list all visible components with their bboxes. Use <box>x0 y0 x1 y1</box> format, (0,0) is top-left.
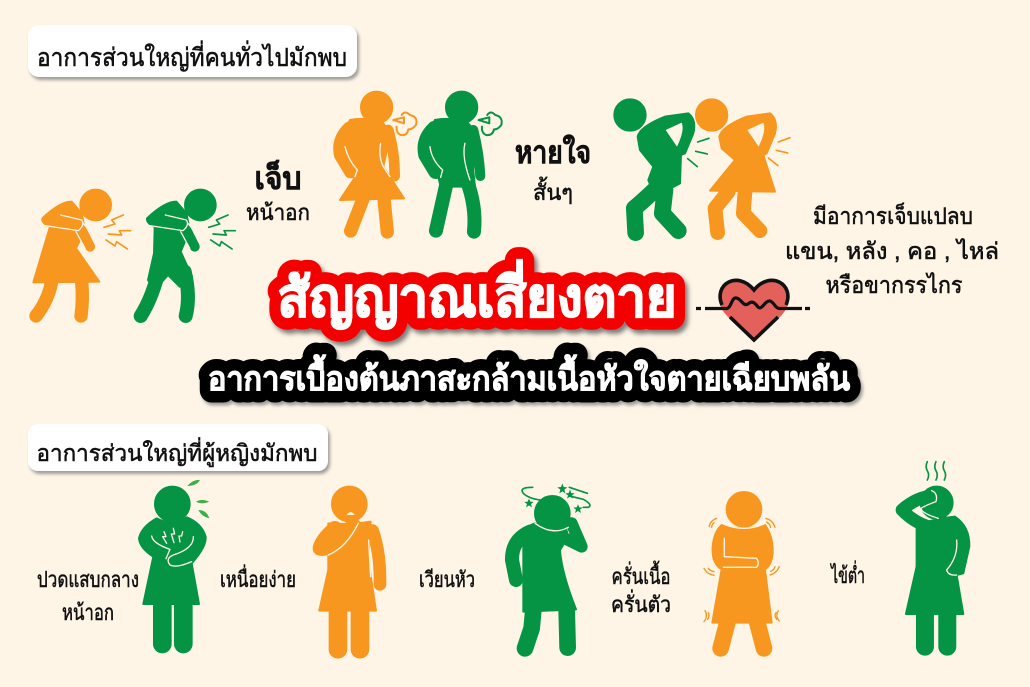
label: short breath <box>515 134 591 205</box>
heading: women's symptoms <box>28 424 328 471</box>
label: radiating pain <box>785 201 999 298</box>
figure: green woman burning chest <box>139 480 209 644</box>
figure: green man short breath <box>425 92 502 232</box>
label: short breath: สั้นๆ <box>533 177 573 205</box>
label: chest pain: หน้าอก <box>246 200 310 225</box>
label: tires easily: เหนื่อยง่าย <box>220 564 296 592</box>
label: chest pain <box>246 159 310 225</box>
figure: orange woman short breath <box>340 92 416 232</box>
label: feverish chills: ครั่นเนื้อ <box>612 561 670 589</box>
figure: green woman fever <box>902 462 969 647</box>
figure: orange woman chest pain <box>33 190 131 316</box>
label: radiating pain: หรือขากรรไกร <box>826 272 962 298</box>
icon: heart with pulse <box>696 280 810 341</box>
label: feverish chills: ครั่นตัว <box>611 589 671 617</box>
subtitle: อาการเบื้องต้นภาสะกล้ามเนื้อหัวใจตายเฉียบพลัน <box>208 354 850 397</box>
label: burning chest <box>37 567 139 625</box>
label: radiating pain: มีอาการเจ็บแปลบ <box>813 201 973 229</box>
heading: women's symptoms: อาการส่วนใหญ่ที่ผู้หญิงมักพบ <box>36 437 318 467</box>
heading: common symptoms: อาการส่วนใหญ่ที่คนทั่วไปมักพบ <box>37 40 347 72</box>
label: burning chest: ปวดแสบกลาง <box>37 567 139 592</box>
label: dizzy: เวียนหัว <box>419 567 475 592</box>
figure: green man back pain <box>614 99 709 233</box>
heading: common symptoms <box>28 25 357 77</box>
label: radiating pain: แขน, หลัง , คอ , ไหล่ <box>785 238 999 264</box>
label: burning chest: หน้าอก <box>62 600 114 625</box>
label: feverish chills <box>611 561 671 617</box>
title: สัญญาณเสี่ยงตาย <box>278 259 676 329</box>
label: low fever: ไข้ต่ำ <box>830 560 865 588</box>
figure: orange woman shivering <box>704 492 779 648</box>
title: สัญญาณเสี่ยงตาย <box>278 259 676 329</box>
figure: green man chest pain <box>141 190 235 316</box>
figure: green woman dizzy <box>512 483 590 648</box>
label: short breath: หายใจ <box>515 134 591 170</box>
label: chest pain: เจ็บ <box>254 159 302 196</box>
figure: orange woman tired <box>319 487 380 649</box>
subtitle: อาการเบื้องต้นภาสะกล้ามเนื้อหัวใจตายเฉียบพลัน <box>208 354 850 397</box>
figure: orange woman back pain <box>696 99 790 233</box>
